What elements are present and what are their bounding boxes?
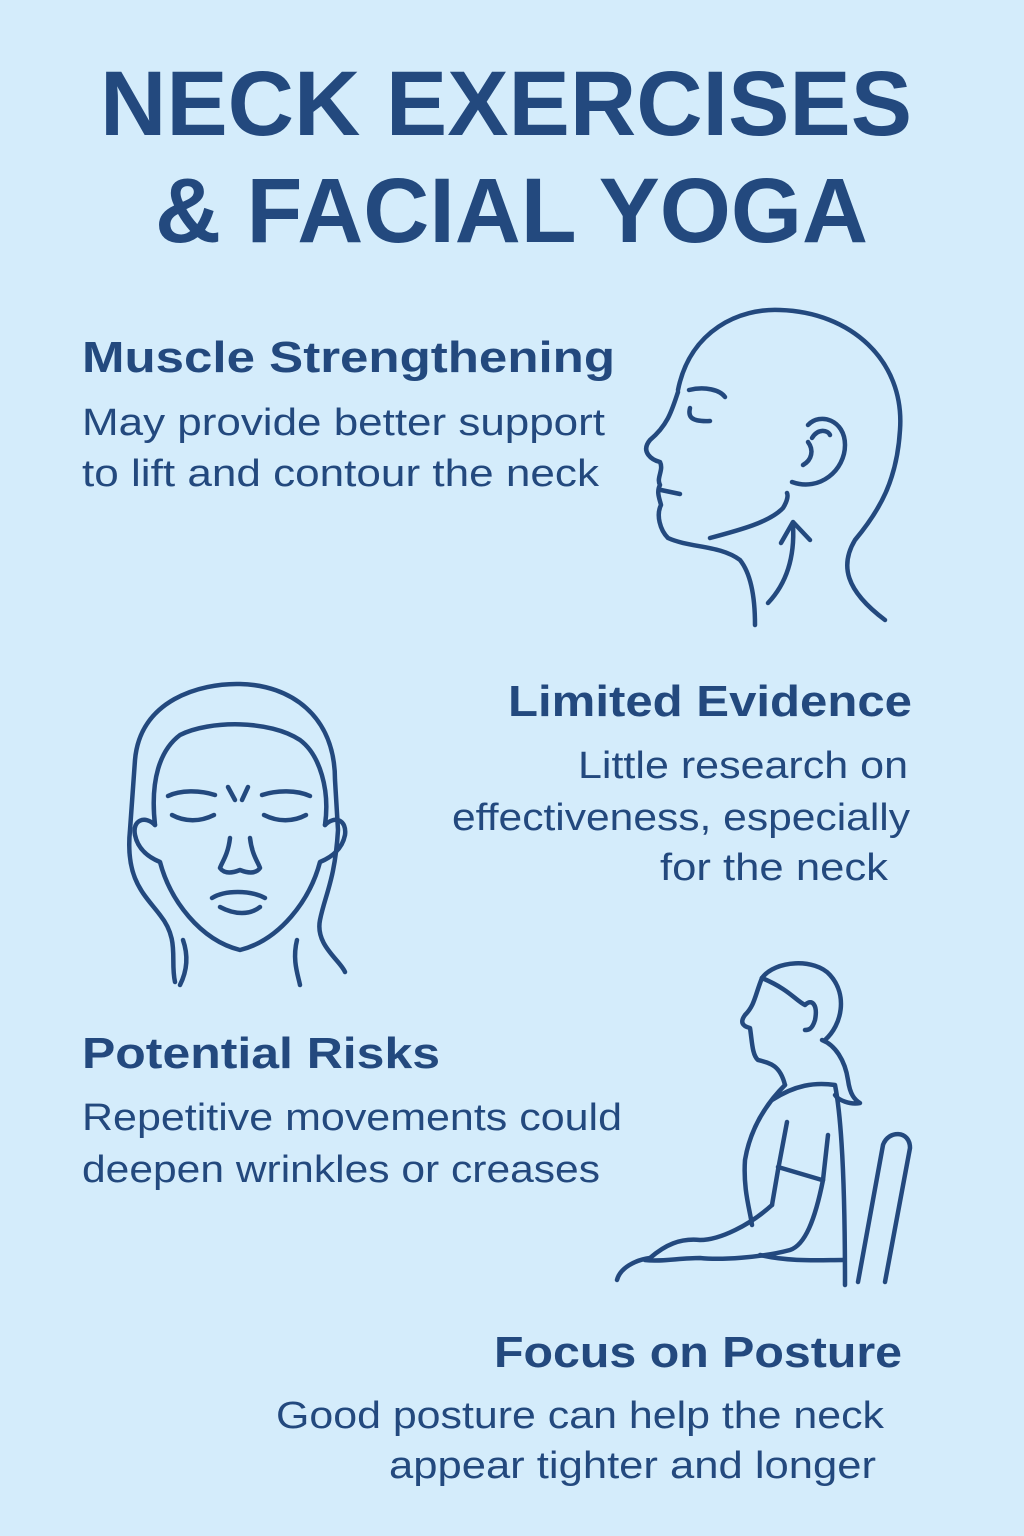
section: potential risks (82, 1029, 622, 1191)
section: focus on posture: Good posture can help the neck (276, 1395, 885, 1437)
icon: head profile with upward arrow (646, 310, 900, 625)
section: limited evidence: Limited Evidence (508, 677, 912, 726)
section: focus on posture: appear tighter and longer (389, 1445, 876, 1487)
section: limited evidence: Little research on (578, 745, 908, 787)
section: muscle strengthening: Muscle Strengthening (82, 333, 615, 382)
section: muscle strengthening: to lift and contour the neck (82, 453, 600, 495)
title (100, 53, 912, 262)
section: potential risks: Repetitive movements could (82, 1097, 622, 1139)
icon: seated woman with good posture (617, 963, 910, 1285)
section: muscle strengthening (82, 333, 615, 495)
section: limited evidence: for the neck (660, 847, 889, 889)
section: limited evidence (452, 677, 912, 889)
icon: front face with furrowed brow (129, 684, 345, 985)
section: focus on posture (276, 1328, 902, 1487)
section: limited evidence: effectiveness, especially (452, 797, 910, 839)
title: NECK EXERCISES (100, 53, 912, 155)
section: focus on posture: Focus on Posture (494, 1328, 902, 1377)
section: muscle strengthening: May provide better support (82, 402, 606, 444)
section: potential risks: Potential Risks (82, 1029, 440, 1078)
section: potential risks: deepen wrinkles or creases (82, 1149, 600, 1191)
title: & FACIAL YOGA (155, 160, 868, 262)
